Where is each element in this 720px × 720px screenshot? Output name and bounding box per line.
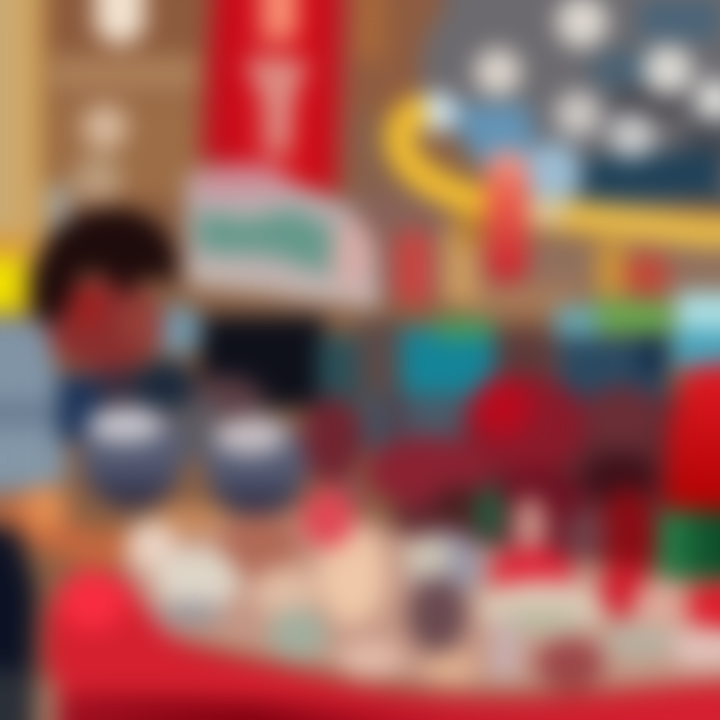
table ornaments base	[120, 510, 720, 690]
striped shirt	[0, 318, 66, 494]
arm	[22, 485, 118, 548]
dome: blue-grey ceiling	[420, 0, 720, 206]
teal display boxes	[401, 292, 720, 439]
face	[47, 279, 163, 371]
maroon background of display	[395, 390, 675, 560]
red figures on display	[302, 375, 662, 583]
red table	[34, 569, 720, 720]
jacket and torso	[58, 305, 203, 441]
left yellow column	[0, 0, 45, 312]
left wall with panels	[28, 0, 210, 235]
dark trousers	[0, 525, 36, 720]
hanging lanterns and columns	[394, 150, 670, 306]
wall lights	[74, 0, 146, 204]
ceiling ring: yellow band	[399, 108, 720, 233]
snow globes	[80, 404, 307, 516]
hair	[32, 208, 178, 325]
person: man with curly hair	[0, 208, 203, 720]
dark shop interior	[170, 316, 404, 460]
elf figure at right edge	[658, 362, 720, 577]
white and green sign	[186, 163, 380, 310]
dome lights	[418, 0, 720, 159]
red hanging banner	[200, 0, 347, 196]
ornaments on table	[126, 488, 720, 690]
